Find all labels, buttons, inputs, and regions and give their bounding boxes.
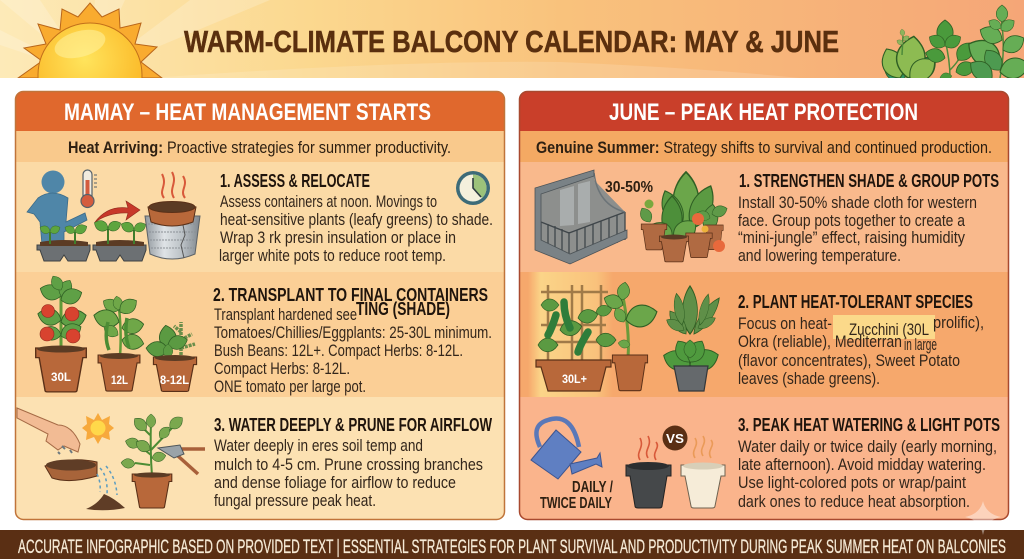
May intro text: Heat Arriving: Proactive strategies for summer productivity. [68,138,451,157]
icon: watering can [531,419,602,479]
icon: insulated pot [145,172,200,259]
step text: Wrap 3 rk presin insulation or place in [220,229,456,247]
June step 3 [531,415,1000,512]
step text: Assess containers at noon. Movings to [220,193,437,211]
icon: hand with mulch [17,408,97,481]
label: daily / twice daily [540,479,614,512]
icon: clock [456,171,490,205]
icon: sparkle watermark [965,501,1001,535]
step text: (flavor concentrates), Sweet Potato [738,352,960,370]
icon: seedling trays [37,218,148,261]
icon: dark pot with steam [626,436,671,508]
step text [214,437,483,510]
May heading: MAMAY – HEAT MANAGEMENT STARTS [64,99,431,126]
title: WARM-CLIMATE BALCONY CALENDAR: MAY & JUNE [184,24,839,59]
step text: prolific), [933,314,984,332]
step text [738,438,997,511]
step text: and dense foliage for airflow to reduce [214,474,456,492]
step text: and lowering temperature. [738,247,901,265]
step heading: 3. WATER DEEPLY & PRUNE FOR AIRFLOW [214,415,492,435]
step text: dark ones to reduce heat absorption. [738,493,970,511]
step text: Okra (reliable), Mediterran [738,333,902,351]
step text: Zucchini (30L [849,321,929,339]
label: shade percentage: 30-50% [605,179,653,196]
icon: trellis with cucumbers [538,285,616,360]
icon: sun [82,413,114,444]
panel: June [519,91,1009,520]
step text: ONE tomato per large pot. [214,378,366,396]
step heading: 1. ASSESS & RELOCATE [220,171,370,191]
icon: balcony with shade cloth [535,170,627,264]
May step 2 [36,273,492,396]
step text: larger white pots to reduce root temp. [219,247,446,265]
icon: bean plant in 12L pot: 12L [111,373,128,387]
step text: face. Group pots together to create a [738,212,966,230]
step text: leaves (shade greens). [738,370,880,388]
step text: fungal pressure peak heat. [214,492,376,510]
step text: Transplant hardened see [214,306,357,324]
June step 1 [535,170,999,265]
icon: tomato plant in 30L pot [36,273,88,392]
step text [738,194,977,265]
step text [214,306,492,396]
step text [219,193,493,265]
icon: 30L planter: 30L+ [562,372,587,386]
step text: Focus on heat- [738,315,832,333]
icon: bean plant in 12L pot [92,295,145,391]
icon: herbs in 8-12L pot [145,322,197,391]
label: daily / twice daily: DAILY / [572,479,614,496]
step text: heat-sensitive plants (leafy greens) to shade. [220,211,493,229]
June step 2 [536,281,984,391]
icon: light pot with steam [681,436,725,508]
step text: in large [904,336,937,354]
icon: sweet potato in grey pot [660,337,722,391]
step text: Water deeply in eres soil temp and [214,437,423,455]
May step 1 [27,170,493,265]
icon: sun [17,2,163,78]
icon: versus badge [662,426,688,450]
icon: water drops and mulch pile [86,466,125,510]
icon: person and thermometer [27,170,97,245]
icon: 30L planter [536,360,611,391]
icon: herbs [882,4,1024,78]
icon: versus badge: VS [666,432,684,446]
step text: late afternoon). Avoid midday watering. [738,456,986,474]
icon: herbs in 8-12L pot: 8-12L [160,373,189,387]
yellow overprint patch [833,315,935,339]
icon: grouped pots [637,172,729,262]
icon: plant with pruners [121,414,205,508]
step text: Compact Herbs: 8-12L. [214,360,350,378]
step text: Use light-colored pots or wrap/paint [738,474,966,492]
step text: “mini-jungle” effect, raising humidity [738,229,966,247]
icon: zucchini in pot [602,281,660,391]
footer bar [0,530,1024,559]
step text: Bush Beans: 12L+. Compact Herbs: 8-12L. [214,342,463,360]
step heading: 2. TRANSPLANT TO FINAL CONTAINERS [213,285,488,305]
June heading: JUNE – PEAK HEAT PROTECTION [609,99,918,126]
step text: Install 30-50% shade cloth for western [738,194,977,212]
icon: tomato plant in 30L pot: 30L [51,370,71,384]
May step 3 [17,408,492,510]
step text: Tomatoes/Chillies/Eggplants: 25-30L minimum. [214,324,492,342]
step text: mulch to 4-5 cm. Prune crossing branches [214,456,483,474]
panel: May [15,91,505,520]
label: daily / twice daily: TWICE DAILY [540,495,612,512]
header banner [0,0,1024,78]
icon: mediterranean herbs [664,286,724,337]
step text [738,314,984,388]
overprinted heading fragment: TING (SHADE) [356,299,450,319]
arrow: relocate [95,201,140,222]
